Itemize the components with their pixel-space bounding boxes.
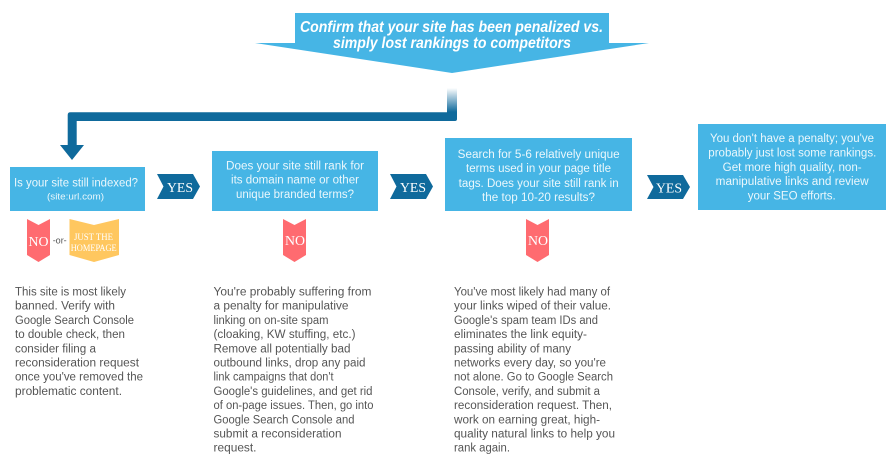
- text block: links devalued advice: reconsideration request. Then,: [454, 400, 612, 412]
- panel: question 1: (site:url.com): [47, 192, 104, 202]
- yes arrow 2: [390, 174, 433, 199]
- panel: question 3: Search for 5-6 relatively unique: [458, 149, 620, 161]
- text block: manipulative linking advice: [214, 286, 374, 455]
- text block: links devalued advice: quality natural links to help you: [454, 428, 615, 440]
- just the homepage badge: HOMEPAGE: [71, 243, 117, 253]
- text block: banned advice: Google Search Console: [15, 315, 134, 327]
- text block: links devalued advice: You've most likely had many of: [454, 286, 611, 298]
- panel: question 2: its domain name or other: [231, 175, 359, 187]
- text block: links devalued advice: rank again.: [454, 443, 510, 455]
- text block: manipulative linking advice: Google Search Console and: [214, 414, 354, 426]
- panel: question 1: Is your site still indexed?: [14, 178, 138, 190]
- text block: manipulative linking advice: You're probably suffering from: [214, 286, 372, 298]
- panel: conclusion: manipulative links and review: [716, 176, 869, 188]
- text block: links devalued advice: Google's spam team IDs and: [454, 315, 598, 327]
- panel: question 3: tags. Does your site still rank in: [459, 178, 619, 190]
- text block: manipulative linking advice: submit a reconsideration: [214, 428, 342, 440]
- title text: Confirm that your site has been penalized vs.: [300, 19, 603, 36]
- title text: simply lost rankings to competitors: [333, 35, 571, 52]
- panel: question 3: terms used in your page title: [466, 163, 611, 175]
- panel: conclusion: You don't have a penalty; you've: [710, 133, 874, 145]
- title text: [300, 19, 603, 52]
- text block: manipulative linking advice: link campaigns that don't: [214, 372, 334, 384]
- yes arrow 1: [157, 174, 200, 199]
- text block: links devalued advice: not alone. Go to Google Search: [454, 372, 613, 384]
- panel: question 1: [10, 167, 145, 211]
- text block: banned advice: consider filing a: [15, 343, 97, 355]
- text block: links devalued advice: [453, 286, 615, 455]
- text block: banned advice: This site is most likely: [15, 286, 126, 298]
- text block: links devalued advice: networks every day, so you're: [454, 358, 606, 370]
- panel: question 2: unique branded terms?: [236, 189, 354, 201]
- no badge 2: NO: [285, 233, 305, 248]
- yes arrow 3: YES: [656, 182, 682, 196]
- text block: manipulative linking advice: outbound links, drop any paid: [214, 358, 366, 370]
- just the homepage badge: [70, 219, 119, 262]
- no badge 1: [27, 219, 50, 262]
- text block: manipulative linking advice: Remove all potentially bad: [214, 343, 350, 355]
- text block: manipulative linking advice: request.: [214, 443, 256, 455]
- text block: banned advice: banned. Verify with: [15, 301, 115, 313]
- text block: banned advice: [15, 286, 143, 398]
- panel: question 2: [212, 151, 378, 211]
- text block: banned advice: problematic content.: [15, 386, 122, 398]
- text block: links devalued advice: your links wiped of their value.: [454, 301, 611, 313]
- yes arrow 2: YES: [400, 181, 426, 196]
- panel: conclusion: Get more high quality, non-: [723, 162, 862, 174]
- text block: manipulative linking advice: linking on on-site spam: [214, 315, 328, 327]
- panel: question 2: Does your site still rank for: [226, 160, 364, 172]
- text block: links devalued advice: eliminates the link equity-: [454, 329, 587, 341]
- text block: manipulative linking advice: (cloaking, KW stuffing, etc.): [214, 329, 356, 341]
- connector arrow from banner to first question: [60, 88, 457, 160]
- no badge 3: [526, 219, 549, 262]
- panel: conclusion: your SEO efforts.: [748, 191, 836, 203]
- text block: manipulative linking advice: a penalty for manipulative: [214, 301, 348, 313]
- text block: links devalued advice: work on earning great, high-: [453, 414, 600, 426]
- text block: banned advice: to double check, then: [15, 329, 125, 341]
- yes arrow 3: [647, 175, 690, 199]
- no badge 2: [283, 219, 306, 262]
- panel: conclusion: probably just lost some rankings.: [708, 148, 876, 160]
- title banner arrow: [255, 13, 649, 73]
- no badge 3: NO: [528, 233, 548, 248]
- yes arrow 1: YES: [167, 181, 193, 196]
- no badge 1: NO: [28, 234, 49, 249]
- panel: conclusion: [698, 124, 886, 210]
- text block: manipulative linking advice: Google's guidelines, and get rid: [214, 386, 372, 398]
- panel: question 3: the top 10-20 results?: [482, 192, 595, 204]
- text block: banned advice: once you've removed the: [15, 372, 143, 384]
- text block: banned advice: reconsideration request: [15, 358, 140, 370]
- panel: question 3: [445, 138, 632, 211]
- text block: manipulative linking advice: of on-page issues. Then, go into: [214, 400, 374, 412]
- just the homepage badge: JUST THE: [74, 232, 113, 242]
- text block: links devalued advice: passing ability of many: [454, 343, 571, 355]
- text block: links devalued advice: Console, verify, and submit a: [454, 386, 601, 398]
- or label: -or-: [53, 236, 67, 246]
